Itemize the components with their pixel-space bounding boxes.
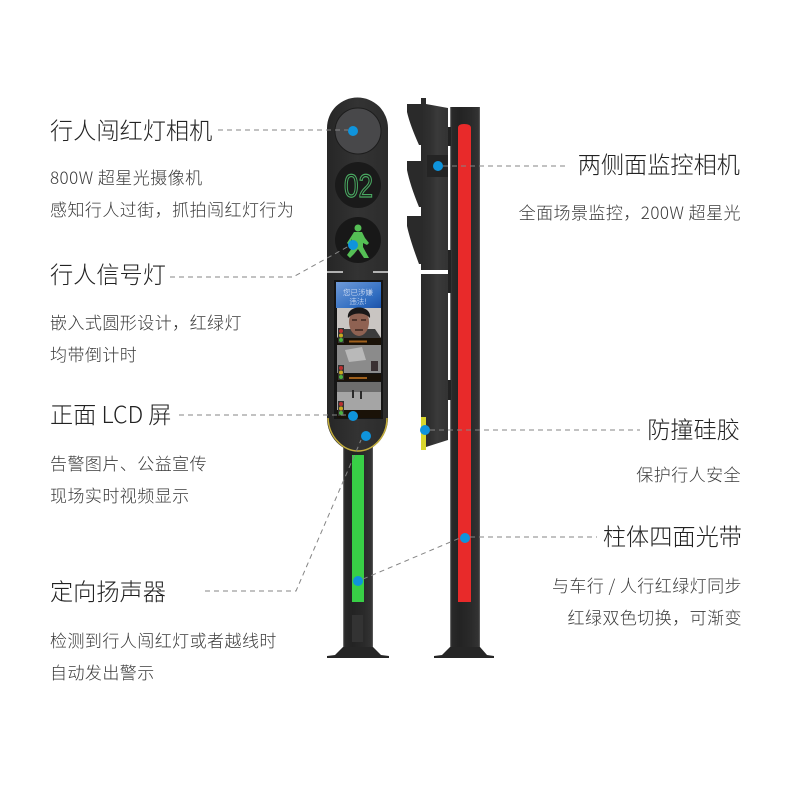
mini signals [338, 328, 344, 416]
green light strip [352, 455, 364, 602]
label: light strip [552, 518, 742, 629]
red light strip [458, 124, 471, 602]
label: front LCD: 正面 LCD 屏 [50, 396, 171, 430]
side camera [427, 155, 448, 177]
label: pedestrian red light camera: 感知行人过街，抓拍闯红灯行为 [50, 196, 294, 221]
side pole [450, 107, 480, 651]
upper side housing [421, 98, 448, 270]
label: light strip: 红绿双色切换，可渐变 [568, 604, 742, 629]
front view: traffic signal pole [327, 97, 389, 658]
label: directional speaker: 定向扬声器 [50, 573, 166, 607]
countdown display: 02 [344, 168, 373, 204]
camera lens [335, 108, 381, 154]
label: light strip: 与车行 / 人行红绿灯同步 [552, 572, 742, 597]
label: front LCD: 现场实时视频显示 [50, 482, 190, 507]
label: silicone bumper: 防撞硅胶 [647, 411, 740, 445]
front pole [343, 445, 373, 651]
label: pedestrian signal [50, 256, 242, 366]
label: silicone bumper: 保护行人安全 [636, 461, 741, 486]
mounting brackets [448, 127, 451, 146]
pedestrian signal [335, 217, 381, 263]
label: directional speaker [50, 573, 277, 684]
label: pedestrian red light camera: 800W 超星光摄像机 [50, 164, 203, 189]
captions [337, 338, 381, 345]
LCD screen [334, 280, 383, 419]
callout dots [348, 126, 470, 586]
LCD screen: 您已涉嫌 [343, 287, 373, 298]
label: directional speaker: 检测到行人闯红灯或者越线时 [50, 627, 277, 652]
signal housing [327, 97, 388, 452]
separator seam [327, 271, 388, 273]
leader lines [170, 130, 640, 591]
label: pedestrian signal: 行人信号灯 [50, 256, 166, 290]
speaker grille [352, 615, 363, 642]
lower side housing [421, 274, 448, 447]
label: light strip: 柱体四面光带 [603, 518, 742, 552]
label: pedestrian signal: 均带倒计时 [50, 341, 137, 366]
countdown display [335, 162, 381, 208]
label: side cameras [519, 146, 741, 224]
side view: traffic signal pole [407, 98, 494, 658]
label: pedestrian signal: 嵌入式圆形设计，红绿灯 [50, 309, 242, 334]
side pole base [434, 647, 494, 658]
street photos [337, 345, 381, 373]
LCD screen: 违法! [349, 296, 367, 307]
label: side cameras: 全面场景监控，200W 超星光 [519, 199, 741, 224]
label: directional speaker: 自动发出警示 [50, 659, 155, 684]
label: front LCD: 告警图片、公益宣传 [50, 450, 207, 475]
face photo [337, 308, 381, 338]
screen banner [336, 282, 381, 308]
silicone bumper [421, 417, 426, 450]
visors [407, 104, 423, 264]
gold trim [328, 418, 387, 451]
label: front LCD [50, 396, 207, 507]
label: silicone bumper [636, 411, 741, 486]
front pole base [327, 647, 389, 658]
label: side cameras: 两侧面监控相机 [578, 146, 740, 180]
label: pedestrian red light camera [50, 112, 294, 221]
label: pedestrian red light camera: 行人闯红灯相机 [50, 112, 212, 146]
